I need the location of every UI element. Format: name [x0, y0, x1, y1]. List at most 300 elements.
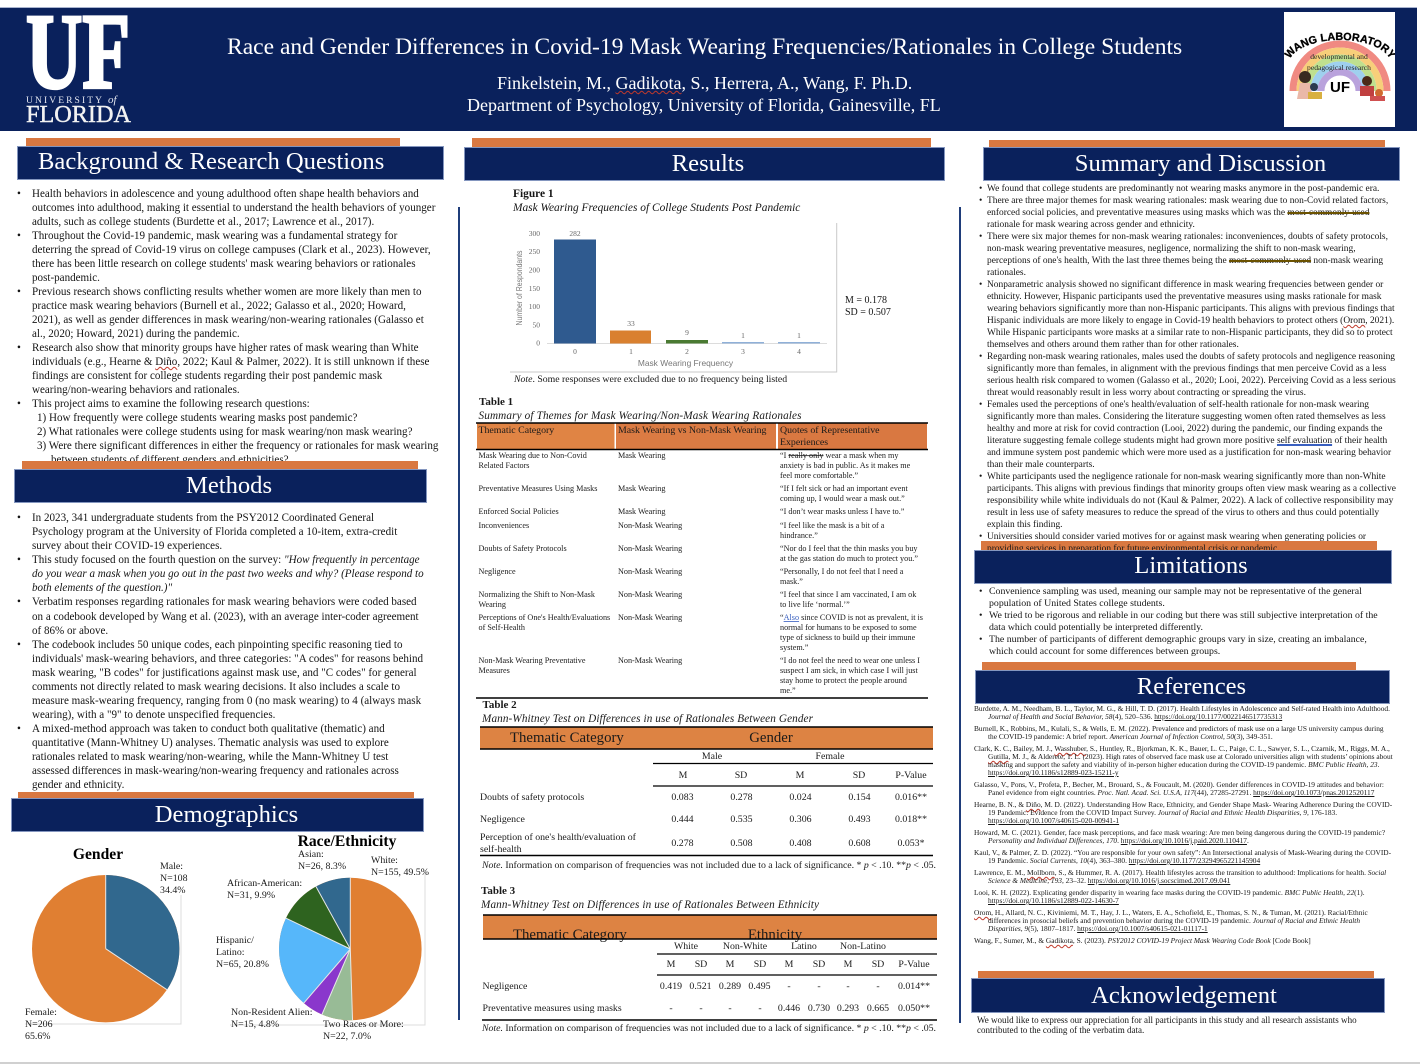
heading: References: References [1137, 673, 1246, 700]
text: • [979, 634, 982, 645]
table 1 column: quotes: feel more comfortable.” [780, 471, 859, 480]
text block: methods bullets: This study focused on the fourth question on the survey: "How frequently in percentage [32, 554, 420, 566]
table 1 header row: Mask Wearing vs Non-Mask Wearing [618, 425, 766, 436]
text block: limitations bullets [979, 586, 1378, 657]
panel heading accent: limitations [981, 541, 1377, 550]
text block: summary bullets: than their male counterparts. [987, 460, 1095, 470]
text block: references: Lawrence, E. M., Mollborn, S., & Hummer, R. A. (2017). Health lifestyles across the transition to adulthood: Implications for health. Social [974, 868, 1386, 877]
table 3 header: Thematic Category [513, 927, 627, 943]
text block: summary bullets: There are three major themes for mask wearing rationales: mask wearing due to non-Covid related factors, [987, 196, 1388, 206]
table 2 rows: 0.508 [730, 838, 753, 849]
text block: summary bullets: threat would reasonably result in less worry about contracting or spreading the virus. [987, 388, 1306, 398]
figure note: Note. Some responses were excluded due to no frequency being listed [514, 374, 787, 384]
text block: background bullets: 1) How frequently were college students wearing masks post pandemic? [37, 412, 357, 424]
pie chart: race and ethnicity: N=65, 20.8% [216, 959, 269, 970]
table 1 header row: Experiences [780, 437, 828, 448]
text block: references: https://doi.org/10.1007/s40615-020-00941-1 [988, 816, 1119, 825]
heading: Acknowledgement: Acknowledgement [1091, 982, 1277, 1009]
pie chart: race and ethnicity: Hispanic/ [216, 935, 254, 946]
table 3 title: Table 3 [481, 885, 516, 897]
text block: background bullets: This project aims to examine the following research questions: [32, 398, 310, 410]
table 3 group labels: SD [872, 959, 884, 970]
column rule: results right [958, 207, 960, 1023]
text block: summary bullets: providing services in preparation for future environmental crisis or pandemic. [987, 544, 1280, 554]
bar chart: mask wearing frequency: 3 [741, 347, 745, 356]
text block: methods bullets: both elements of the question.)" [32, 582, 172, 594]
bar chart: mask wearing frequency: Mask Wearing Frequency [638, 358, 734, 368]
heading: Acknowledgement [971, 978, 1385, 1013]
table 3 rows: 0.495 [748, 981, 771, 992]
text block: references: Howard, M. C. (2021). Gender, face mask perceptions, and face mask wearing: Are men being dangerous during the COVID-19 pandemic? [974, 828, 1385, 837]
text block: background bullets: Health behaviors in adolescence and young adulthood often shape health behaviors and [32, 188, 419, 200]
text block: references: differences in prosocial beliefs and prevention behavior during the COVID-19 pandemic. Journal of Racial and Ethnic Health [988, 916, 1360, 925]
text block: summary bullets: Females used the perceptions of one's health/evaluation of self-health rationale for non-mask wearing [987, 400, 1369, 410]
table 2 rows: 0.018** [895, 814, 927, 825]
table 3 rows: - [728, 1003, 732, 1014]
bar chart: mask wearing frequency: 4 [797, 347, 801, 356]
table 3 rows: 0.665 [867, 1003, 889, 1014]
table 1 column: thematic category: Normalizing the Shift to Non-Mask [478, 590, 596, 599]
table 1 column: thematic category [478, 451, 610, 675]
table 2 header: Thematic Category [510, 730, 624, 746]
table 3 rows: 0.014** [898, 981, 930, 992]
text block: references: Wang, F., Sumer, M., & Gadikota, S. (2023). PSY2012 COVID-19 Project Mask Wearing Code Book [Code Book] [974, 936, 1311, 945]
text block: limitations bullets: We tried to be rigorous and reliable in our coding but there was still subjective interpretation of the [989, 610, 1378, 621]
table 2 rows [480, 792, 927, 855]
table 1 column: quotes: “If I felt sick or had an important event [780, 484, 908, 493]
table 3 rows: 0.521 [689, 981, 712, 992]
text block: summary bullets: There were six major themes for non-mask wearing rationales: inconveniences, doubts of safety protocols, [987, 232, 1388, 242]
panel heading accent: references [982, 662, 1356, 670]
text block: summary bullets: explain this finding. [987, 520, 1063, 530]
bar chart: mask wearing frequency: 0 [536, 338, 540, 348]
pie chart: race and ethnicity: Non-Resident Alien: [231, 1007, 312, 1018]
heading: Limitations: Limitations [1134, 552, 1248, 579]
text block: background bullets [17, 188, 438, 466]
heading: Background & Research Questions: Background & Research Questions [38, 148, 384, 175]
bar chart: mask wearing frequency: 1 [797, 331, 801, 340]
text block: summary bullets: White participants used the negligence rationale for non-mask wearing significantly more than non-White [987, 472, 1386, 482]
pie chart: race and ethnicity: N=155, 49.5% [371, 867, 429, 878]
text block: limitations bullets: which could account for some differences between groups. [989, 646, 1220, 657]
text block: summary bullets: literature suggesting female college students might had grown more positive self evaluation of their health [987, 436, 1387, 446]
table 1 column: thematic category: Enforced Social Policies [478, 507, 559, 516]
table 1 column: quotes: “I really only wear a mask when my [780, 451, 899, 460]
text block: methods bullets: rationales related to mask wearing/non-wearing, while the Mann-Whitney U test [32, 751, 388, 763]
panel heading accent: acknowledgement [978, 971, 1374, 979]
text block: references: Personality and Individual Differences, 170. https://doi.org/10.1016/j.paid.2020.110417. [988, 836, 1249, 845]
heading: Demographics: Demographics [155, 801, 298, 828]
bar chart: mask wearing frequency: 9 [685, 328, 689, 337]
table 1 column: thematic category: Mask Wearing due to Non-Covid [478, 451, 587, 460]
table 1 column: thematic category: Inconveniences [478, 521, 529, 530]
text block: methods bullets: quantitative (Mann-Whitney U) analyses. Thematic analysis was used to explore [32, 737, 389, 749]
table 3 group labels: M [667, 959, 676, 970]
table 2 rows: 0.408 [789, 838, 812, 849]
table 3 group labels: P-Value [898, 959, 930, 970]
table 2 rows: 0.053* [897, 838, 925, 849]
table 1 column: quotes: suspect I am sick, in which case I will just [780, 666, 918, 675]
text block: summary bullets: Hispanic individuals are more likely to engage in Covid-19 health behaviors to protect others (Orom, 2021). [987, 316, 1394, 326]
table 2 header: Gender [749, 730, 793, 746]
text block: methods bullets: gender and ethnicity. [32, 779, 124, 791]
heading: Results: Results [672, 150, 744, 177]
table 3 header [483, 915, 937, 943]
table 1 header row: Quotes of Representative [780, 425, 880, 436]
table 1 column: wearing type: Mask Wearing [618, 507, 665, 516]
logo: Wang Laboratory: pedagogical research [1307, 63, 1371, 72]
table 2 rows: Doubts of safety protocols [480, 792, 584, 803]
table 1 column: quotes: at the gas station do much to protect you.” [780, 554, 918, 563]
text block: summary bullets: Nonparametric analysis showed no significant difference in mask wearing frequencies between gender or [987, 280, 1383, 290]
table 1 column: quotes: “I feel like the mask is a bit of a [780, 521, 885, 530]
table 1 column: quotes: stay home to protect the people around [780, 676, 907, 685]
table 3 group labels [657, 941, 937, 975]
table 1 column: thematic category: Related Factors [478, 461, 529, 470]
text block: methods bullets: of 86% or above. [32, 625, 108, 637]
pie chart: race and ethnicity [216, 833, 429, 1042]
table 3 rows: - [846, 981, 850, 992]
panel heading accent: results [472, 138, 931, 147]
pie chart: race and ethnicity: Two Races or More: [323, 1019, 404, 1030]
bottom page edge [0, 1062, 1420, 1064]
text block: references: Science & Medicine, 193, 23–32. https://doi.org/10.1016/j.socscimed.2017.09.041 [988, 876, 1230, 885]
table 1 column: quotes: system.” [780, 643, 809, 652]
table 2 rows: 0.024 [789, 792, 812, 803]
table 1 column: wearing type: Non-Mask Wearing [618, 613, 682, 622]
text block: summary bullets: and immune system post pandemic which were more used as a justification for non-mask wearing behavior [987, 448, 1391, 458]
text block: limitations bullets: population of United States college students. [989, 598, 1165, 609]
table 3 rows: - [758, 1003, 762, 1014]
table 1 header row: Thematic Category [478, 425, 554, 436]
text block: summary bullets: We found that college students are predominantly not wearing masks anymore in the post-pandemic era. [987, 184, 1379, 194]
text block: summary bullets: wearing behaviors significantly more than non-Hispanic participants. This aligns with previous findings that [987, 304, 1395, 314]
pie chart: race and ethnicity: N=15, 4.8% [231, 1019, 279, 1030]
text: • [17, 188, 21, 200]
bar chart: mask wearing frequency: 1 [629, 347, 633, 356]
chart statistics: M = 0.178 [845, 295, 887, 306]
bar chart: mask wearing frequency: 150 [529, 284, 540, 293]
text block: references: https://doi.org/10.1186/s12889-023-15211-y [988, 768, 1119, 777]
table 3: ethnicity differences [480, 885, 937, 1034]
table 3 rows: Preventative measures using masks [482, 1003, 622, 1014]
text: • [17, 596, 21, 608]
text: • [979, 352, 982, 362]
pie chart: gender: Female: [25, 1007, 57, 1018]
table 2: gender differences [480, 699, 936, 871]
table 3 group labels: SD [754, 959, 766, 970]
text block: references: 19 Pandemic: Evidence from the COVID Impact Survey. Journal of Racial and Ethnic Health Disparities, 9, 176-183. [988, 808, 1337, 817]
pie chart: gender: Gender [73, 846, 123, 863]
table 1 column: wearing type: Mask Wearing [618, 484, 665, 493]
bar chart: mask wearing frequency: 200 [529, 266, 540, 274]
heading: Background & Research Questions [17, 146, 444, 180]
text block: methods bullets: assessed differences in mask-wearing/non-wearing frequency and rationales across [32, 765, 399, 777]
text: • [17, 398, 21, 410]
text block: background bullets: 3) Were there significant differences in either the frequency or rationales for mask wearing [37, 440, 438, 452]
text block: summary bullets: non-mask wearing preventative measures, negligence, normalizing the shift to non-mask wearing, [987, 244, 1356, 254]
text block: references: Clark, K. C., Bailey, M. J., Wasshuber, S., Huntley, R., Bjorkman, K. K., Bauer, L. C., Paige, C. L., Sawyer, S. L., Czarnik, M., Riggs, M. A., [974, 744, 1390, 753]
text block: references: Gutilla, M. J., & Alderete, T. L. (2023). High rates of observed face mask use at Colorado universities align with students’ opinions about [988, 752, 1393, 761]
table 2 group labels: M [679, 770, 688, 781]
table 3 title: Mann-Whitney Test on Differences in use of Rationales Between Ethnicity [480, 899, 819, 911]
text block: background bullets: between students of different genders and ethnicities? [51, 454, 289, 466]
text block: methods bullets: In 2023, 341 undergraduate students from the PSY2012 Coordinated General [32, 512, 374, 524]
pie chart: race and ethnicity: White: [371, 855, 398, 866]
pie chart: gender: Male: [160, 861, 183, 872]
table 1 column: quotes: “Also since COVID is not as prevalent, it is [780, 613, 923, 622]
text: • [979, 280, 982, 290]
panel heading accent: methods [22, 461, 418, 470]
table 1 column: quotes: hindrance.” [780, 531, 818, 540]
bar chart: mask wearing frequency: 100 [529, 302, 540, 311]
text block: background bullets: Research also show that minority groups have higher rates of mask wearing than White [32, 342, 419, 354]
table 1 column: quotes: “I feel that since I am vaccinated, I am ok [780, 590, 917, 599]
table 1 column: quotes: “I do not feel the need to wear one unless I [780, 656, 920, 665]
chart statistics [845, 295, 891, 318]
table 2 title: Table 2 [482, 699, 517, 711]
text block: summary bullets: participants. This aligns with previous findings that minority groups often view mask wearing as a collective [987, 484, 1396, 494]
table 3 rows: 0.419 [660, 981, 682, 992]
table 1 title [478, 396, 802, 422]
text block: background bullets: deterring the spread of Covid-19 virus on college campuses (Clark et al., 2023). However, [32, 244, 431, 256]
table 2 rows: 0.608 [848, 838, 871, 849]
table 3 group labels: Non-White [723, 941, 768, 952]
text block: acknowledgement [977, 1015, 1357, 1035]
text: • [17, 723, 21, 735]
pie chart: gender [25, 846, 188, 1042]
table 1 column: quotes: type of sickness to build up their immune [780, 633, 916, 642]
table 1 column: thematic category: Non-Mask Wearing Preventative [478, 656, 586, 665]
table 2 group labels: P-Value [895, 770, 927, 781]
table 3 group labels: Latino [791, 941, 817, 952]
table 1 column: wearing type [618, 451, 682, 665]
heading: Methods [14, 469, 427, 503]
table 3 rows: - [817, 981, 821, 992]
text block: methods bullets: A mixed-method approach was taken to conduct both qualitative (thematic) and [32, 723, 385, 735]
text block: references: Disparities, 9(5), 1807–1817. https://doi.org/10.1007/s40615-021-01117-1 [988, 924, 1208, 933]
table 3 rows: - [699, 1003, 703, 1014]
table 1 column: thematic category: Preventative Measures Using Masks [478, 484, 597, 493]
table 1 column: wearing type: Non-Mask Wearing [618, 656, 682, 665]
text block: background bullets: wearing/non-wearing behaviors and rationales. [32, 384, 240, 396]
bar chart: mask wearing frequency: 250 [529, 247, 540, 256]
text block: summary bullets: While Hispanic participants wore masks at a similar rate to non-Hispanic participants, they did so to protect [987, 328, 1393, 338]
table 3 group labels: M [785, 959, 794, 970]
table 2 header [480, 727, 933, 749]
table 1 column: quotes: to live life ‘normal.’” [780, 600, 850, 609]
table 3 group labels: SD [813, 959, 825, 970]
table 3 rows: 0.293 [837, 1003, 859, 1014]
text: • [979, 532, 982, 542]
text block: methods bullets: mask wearing, "B codes" for justifications against mask use, and "C codes" for general [32, 667, 417, 679]
table 1 column: thematic category: Measures [478, 666, 510, 675]
table 2 rows: 0.493 [848, 814, 871, 825]
text block: background bullets: 2) What rationales were college students using for mask wearing/non mask wearing? [37, 426, 412, 438]
pie chart: gender: N=206 [25, 1019, 53, 1030]
table 1 column: thematic category: Wearing [478, 600, 506, 609]
table 2 group labels: Female [816, 751, 845, 762]
text block: references: the COVID-19 pandemic: A brief report. American Journal of Infection Control, 50(3), 349-351. [988, 732, 1273, 741]
text block: methods bullets: on a codebook developed by Wang et al. (2023), with an average inter-coder agreement [32, 611, 419, 623]
department affiliation: Department of Psychology, University of Florida, Gainesville, FL [467, 95, 941, 115]
table 2 group labels: SD [735, 770, 747, 781]
text block: background bullets: individuals (e.g., Hearne & Diño, 2022; Kaul & Palmer, 2022). It is still unknown if these [32, 356, 429, 368]
text block: references: https://doi.org/10.1186/s12889-022-14630-7 [988, 896, 1119, 905]
bar chart: mask wearing frequency [510, 223, 838, 372]
text block: summary bullets: ethnicity. However, Hispanic participants used the preventative measures using masks rationale for mask [987, 292, 1381, 302]
heading: References [975, 670, 1390, 704]
pie chart: race and ethnicity: Asian: [298, 849, 324, 860]
text block: summary bullets: Universities should consider varied motives for or against mask wearing when generating policies or [987, 532, 1366, 542]
logo: Wang Laboratory: UF [1330, 79, 1350, 96]
text block: summary bullets: healthy and more at risk for covid contraction (Looi, 2022) during the pandemic, our finding expands the [987, 424, 1382, 434]
table 1 column: thematic category: Perceptions of One's Health/Evaluations [478, 613, 610, 622]
table 3 rows: 0.730 [808, 1003, 830, 1014]
text block: background bullets: al., 2020; Howard, 2021) during the pandemic. [32, 328, 240, 340]
table 2 rows: Perception of one's health/evaluation of [480, 832, 637, 843]
table 1 column: wearing type: Non-Mask Wearing [618, 567, 682, 576]
table 1 column: quotes: “Personally, I do not feel that I need a [780, 567, 904, 576]
text block: summary bullets: themselves and others around them rather than for other rationales. [987, 340, 1239, 350]
text block: background bullets: findings are consistent for college students regarding their post pandemic mask [32, 370, 382, 382]
heading: Summary and Discussion: Summary and Discussion [1075, 150, 1326, 177]
logo: Wang Laboratory: developmental and [1310, 52, 1368, 61]
table 3 rows: - [669, 1003, 673, 1014]
table 2 group labels: M [796, 770, 805, 781]
text block: methods bullets: do you wear a mask when you go out in the past two weeks and why? (Please respond to [32, 568, 424, 580]
pie chart: gender: 65.6% [25, 1031, 51, 1042]
text block: background bullets: there has been little research on college students' mask wearing behaviors or rationales [32, 258, 416, 270]
panel heading accent: summary [989, 140, 1385, 148]
text block: references: Burnell, K., Robbins, M., Kulali, S., & Wells, E. M. (2022). Prevalence and predictors of mask use on a large US university campus during [974, 724, 1384, 733]
logo: Wang Laboratory [1284, 12, 1395, 127]
text block: background bullets: adults, such as college students (Burdette et al., 2017; Lawrence et al., 2017). [32, 216, 374, 228]
text: • [17, 512, 21, 524]
table 3 rows: Negligence [482, 981, 528, 992]
text block: summary bullets: serious health risk compared to women (Galasso et al., 2020; Looi, 2022). Perceiving Covid as a less serious [987, 376, 1396, 386]
text block: references: Burdette, A. M., Needham, B. L., Taylor, M. G., & Hill, T. D. (2017). Health Lifestyles in Adolescence and Self-rated Health into Adulthood. [974, 704, 1390, 713]
text block: references: 19 Pandemic. Social Currents, 10(4), 363–380. https://doi.org/10.1177/23294965221145904 [988, 856, 1260, 865]
table 2 title [481, 699, 814, 725]
table 1 column: wearing type: Non-Mask Wearing [618, 590, 682, 599]
table 1 column: quotes: “I don’t wear masks unless I have to.” [780, 507, 905, 516]
table 1: summary of themes [476, 396, 928, 699]
text block: references: Galasso, V., Pons, V., Profeta, P., Becher, M., Brouard, S., & Foucault, M. (2020). Gender differences in COVID-19 attitudes and behavior: [974, 780, 1384, 789]
table 2 rows: 0.278 [730, 792, 753, 803]
text block: summary bullets: significantly more than males. Considering the literature suggesting women often rated themselves as less [987, 412, 1386, 422]
pie chart: gender: 34.4% [160, 885, 186, 896]
table 1 title: Summary of Themes for Mask Wearing/Non-Mask Wearing Rationales [478, 410, 802, 422]
pie chart: race and ethnicity: African-American: [227, 878, 302, 889]
pie chart: race and ethnicity: N=31, 9.9% [227, 890, 275, 901]
column rule: results left [458, 207, 460, 1020]
table 1 header row [476, 423, 928, 450]
text block: references: Hearne, B. N., & Diño, M. D. (2022). Understanding How Race, Ethnicity, and Gender Shape Mask- Wearing Adherence During the COVID- [974, 800, 1392, 809]
text block: background bullets: Throughout the Covid-19 pandemic, mask wearing was a fundamental strategy for [32, 230, 397, 242]
heading: Methods: Methods [186, 472, 272, 499]
table 3 group labels: SD [695, 959, 707, 970]
title: Race and Gender Differences in Covid-19 Mask Wearing Frequencies/Rationales in College Students [227, 34, 1182, 60]
bar chart: mask wearing frequency: 50 [532, 320, 540, 330]
text block: references: Kaul, V., & Palmer, Z. D. (2022). “You are responsible for your own safety”: An Intersectional analysis of Mask-Wearing during the COVID- [974, 848, 1391, 857]
figure 1 caption [512, 188, 800, 214]
text block: summary bullets: Regarding non-mask wearing rationales, males used the doubts of safety protocols and negligence reasoning [987, 352, 1395, 362]
table 1 column: thematic category: Doubts of Safety Protocols [478, 544, 567, 553]
table 1 column: quotes: mask.” [780, 577, 803, 586]
table 3 note: Note. Information on comparison of frequencies was not included due to a lack of significance. * p < .10. **p < .05. [481, 1023, 936, 1034]
text: • [979, 184, 982, 194]
table 1 column: quotes: normal for humans to be exposed to some [780, 623, 917, 632]
text: • [979, 400, 982, 410]
text block: methods bullets: Verbatim responses regarding rationales for mask wearing behaviors were coded based [32, 596, 417, 608]
pie chart: race and ethnicity: Latino: [216, 947, 245, 958]
bar chart: mask wearing frequency: 33 [627, 319, 635, 328]
text block: limitations bullets: data which could potentially be interpreted differently. [989, 622, 1203, 633]
panel: demographics pie charts [25, 833, 429, 1042]
panel heading accent: background [26, 138, 400, 147]
authors: Finkelstein, M., Gadikota, S., Herrera, A., Wang, F. Ph.D. [497, 73, 912, 93]
table 2 rows: 0.083 [671, 792, 694, 803]
table 1 column: thematic category: Negligence [478, 567, 516, 576]
text block: background bullets: outcomes into adulthood, making it essential to understand the health behaviors of younger [32, 202, 435, 214]
text: • [17, 342, 21, 354]
text block: methods bullets [17, 512, 424, 791]
text block: summary bullets: rationale for mask wearing across gender and ethnicity. [987, 220, 1195, 230]
table 1 column: wearing type: Mask Wearing [618, 451, 665, 460]
text block: limitations bullets: The number of participants of different demographic groups vary in size, creating an imbalance, [989, 634, 1367, 645]
text: • [979, 610, 982, 621]
bar chart: mask wearing frequency: 1 [741, 331, 745, 340]
text block: summary bullets [979, 184, 1396, 554]
table 3 group labels: Non-Latino [840, 941, 886, 952]
table 2 group labels [653, 751, 933, 786]
text block: summary bullets: result in less use of safety measures to reduce the spread of the virus to others and thus could potentially [987, 508, 1379, 518]
text block: summary bullets: perceptions of one's health, With the last three themes being the most-commonly-used non-mask wearing [987, 256, 1383, 266]
table 2 rows: 0.278 [671, 838, 694, 849]
logo: University of Florida: UNIVERSITY [26, 96, 102, 106]
table 3 rows: - [876, 981, 880, 992]
text: • [17, 230, 21, 242]
text block: summary bullets: responsibility while white individuals do not (Kaul & Palmer, 2022). A lack of collective responsibility may [987, 496, 1393, 506]
pie chart: race and ethnicity: Race/Ethnicity [298, 833, 397, 850]
bar chart: mask wearing frequency: 282 [569, 229, 581, 238]
text block: background bullets: Previous research shows conflicting results whether women are more likely than men to [32, 286, 422, 298]
table 3 rows: - [787, 981, 791, 992]
logo: University of Florida: of [108, 94, 118, 106]
text block: acknowledgement: contributed to the coding of the verbatim data. [977, 1025, 1144, 1035]
bar chart: mask wearing frequency: 2 [685, 347, 689, 356]
table 1 column: wearing type: Non-Mask Wearing [618, 521, 682, 530]
table 3 rows: 0.050** [898, 1003, 930, 1014]
table 2 rows: 0.444 [671, 814, 694, 825]
table 1 column: quotes: coming up, I would wear a mask out.” [780, 494, 905, 503]
figure 1 caption: Figure 1 [513, 188, 554, 200]
table 2 rows: 0.016** [895, 792, 927, 803]
table 3 title [480, 885, 819, 911]
table 2 rows: Negligence [480, 814, 525, 825]
text block: references: masking and support the safety and viability of in-person higher education during the COVID-19 pandemic. BMC Public Health, 23. [988, 760, 1379, 769]
text: • [17, 286, 21, 298]
text: • [17, 639, 21, 651]
pie chart: gender: N=108 [160, 873, 188, 884]
text block: methods bullets: measure mask-wearing frequency, ranging from 0 (no mask wearing) to 4 (always mask [32, 695, 421, 707]
table 2 title: Mann-Whitney Test on Differences in use of Rationales Between Gender [481, 713, 814, 725]
table 2 rows: 0.535 [730, 814, 753, 825]
table 2 group labels: Male [702, 751, 723, 762]
text block: references: Panel evidence from eight countries. Proc. Natl. Acad. Sci. U.S.A, 117(44), 27285-27291. https://doi.org/10.1073/pnas.2012520117 [988, 788, 1374, 797]
table 2 note: Note. Information on comparison of frequencies was not included due to a lack of significance. * p < .10. **p < .05. [481, 860, 936, 871]
